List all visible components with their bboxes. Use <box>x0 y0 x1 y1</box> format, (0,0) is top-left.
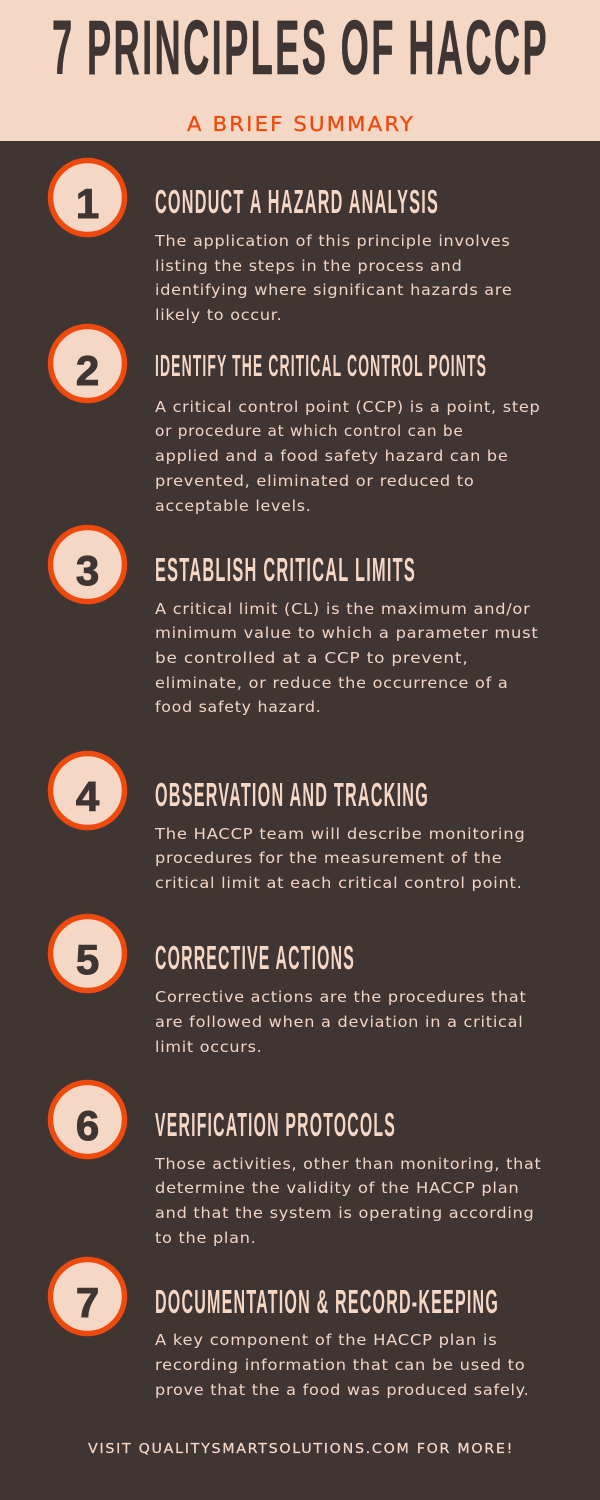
body text 2: applied and a food safety hazard can be <box>155 447 508 465</box>
number badge 1 <box>50 160 124 234</box>
body text 5 <box>155 988 526 1056</box>
body text 3: A critical limit (CL) is the maximum and/or <box>155 600 531 618</box>
body text 7: recording information that can be used to <box>155 1356 526 1374</box>
body text 1: likely to occur. <box>155 306 282 324</box>
number badge 4: 4 <box>76 773 100 820</box>
number badge 3 <box>50 528 124 602</box>
number badge 3: 3 <box>76 547 99 594</box>
footer call to action: VISIT QUALITYSMARTSOLUTIONS.COM FOR MORE! <box>88 1441 514 1457</box>
body text 1: The application of this principle involves <box>154 232 510 250</box>
number badge 1: 1 <box>76 180 99 227</box>
panel: principle 5: CORRECTIVE ACTIONS <box>155 939 355 976</box>
number badge 6 <box>50 1082 124 1156</box>
number badge 2 <box>50 326 124 400</box>
body text 2: or procedure at which control can be <box>155 422 464 440</box>
panel: principle 4 <box>50 754 526 892</box>
body text 1 <box>154 232 512 324</box>
body text 4: critical limit at each critical control point. <box>155 874 522 892</box>
body text 1: listing the steps in the process and <box>155 257 462 275</box>
body text 2 <box>155 398 540 515</box>
header band <box>0 0 600 141</box>
body text 3: minimum value to which a parameter must <box>155 624 538 642</box>
number badge 2: 2 <box>76 347 99 394</box>
body text 5: Corrective actions are the procedures that <box>155 988 526 1006</box>
body text 5: are followed when a deviation in a critical <box>155 1013 524 1031</box>
body text 6: determine the validity of the HACCP plan <box>155 1179 520 1197</box>
number badge 7 <box>50 1260 124 1334</box>
body text 3: be controlled at a CCP to prevent, <box>155 649 468 667</box>
panel: principle 1 <box>50 160 512 324</box>
body text 2: acceptable levels. <box>155 497 312 515</box>
number badge 5 <box>50 916 124 990</box>
body text 3 <box>155 600 538 716</box>
body text 2: prevented, eliminated or reduced to <box>155 472 474 490</box>
body text 6: Those activities, other than monitoring, that <box>154 1155 542 1173</box>
panel: principle 6 <box>50 1082 542 1247</box>
number badge 7: 7 <box>76 1279 99 1326</box>
body text 7: prove that the a food was produced safely. <box>155 1381 530 1399</box>
body text 7 <box>155 1331 530 1399</box>
number badge 6: 6 <box>76 1102 99 1149</box>
panel: principle 2 <box>50 326 540 515</box>
panel: principle 7 <box>50 1260 530 1399</box>
body text 4 <box>154 825 525 892</box>
number badge 4 <box>50 754 124 828</box>
panel: principle 3 <box>50 528 538 716</box>
number badge 5: 5 <box>76 936 99 983</box>
body text 6: and that the system is operating according <box>155 1204 534 1222</box>
body text 3: food safety hazard. <box>155 698 322 716</box>
subtitle: A BRIEF SUMMARY <box>187 112 415 136</box>
body text 2: A critical control point (CCP) is a point, step <box>155 398 540 416</box>
body text 4: The HACCP team will describe monitoring <box>154 825 525 843</box>
panel: principle 5 <box>50 916 526 1056</box>
body text 5: limit occurs. <box>155 1038 262 1056</box>
body text 1: identifying where significant hazards are <box>155 281 512 299</box>
body text 6: to the plan. <box>155 1229 256 1247</box>
body text 6 <box>154 1155 542 1247</box>
body text 4: procedures for the measurement of the <box>155 849 502 867</box>
body text 3: eliminate, or reduce the occurrence of a <box>155 674 508 692</box>
body text 7: A key component of the HACCP plan is <box>155 1331 498 1349</box>
